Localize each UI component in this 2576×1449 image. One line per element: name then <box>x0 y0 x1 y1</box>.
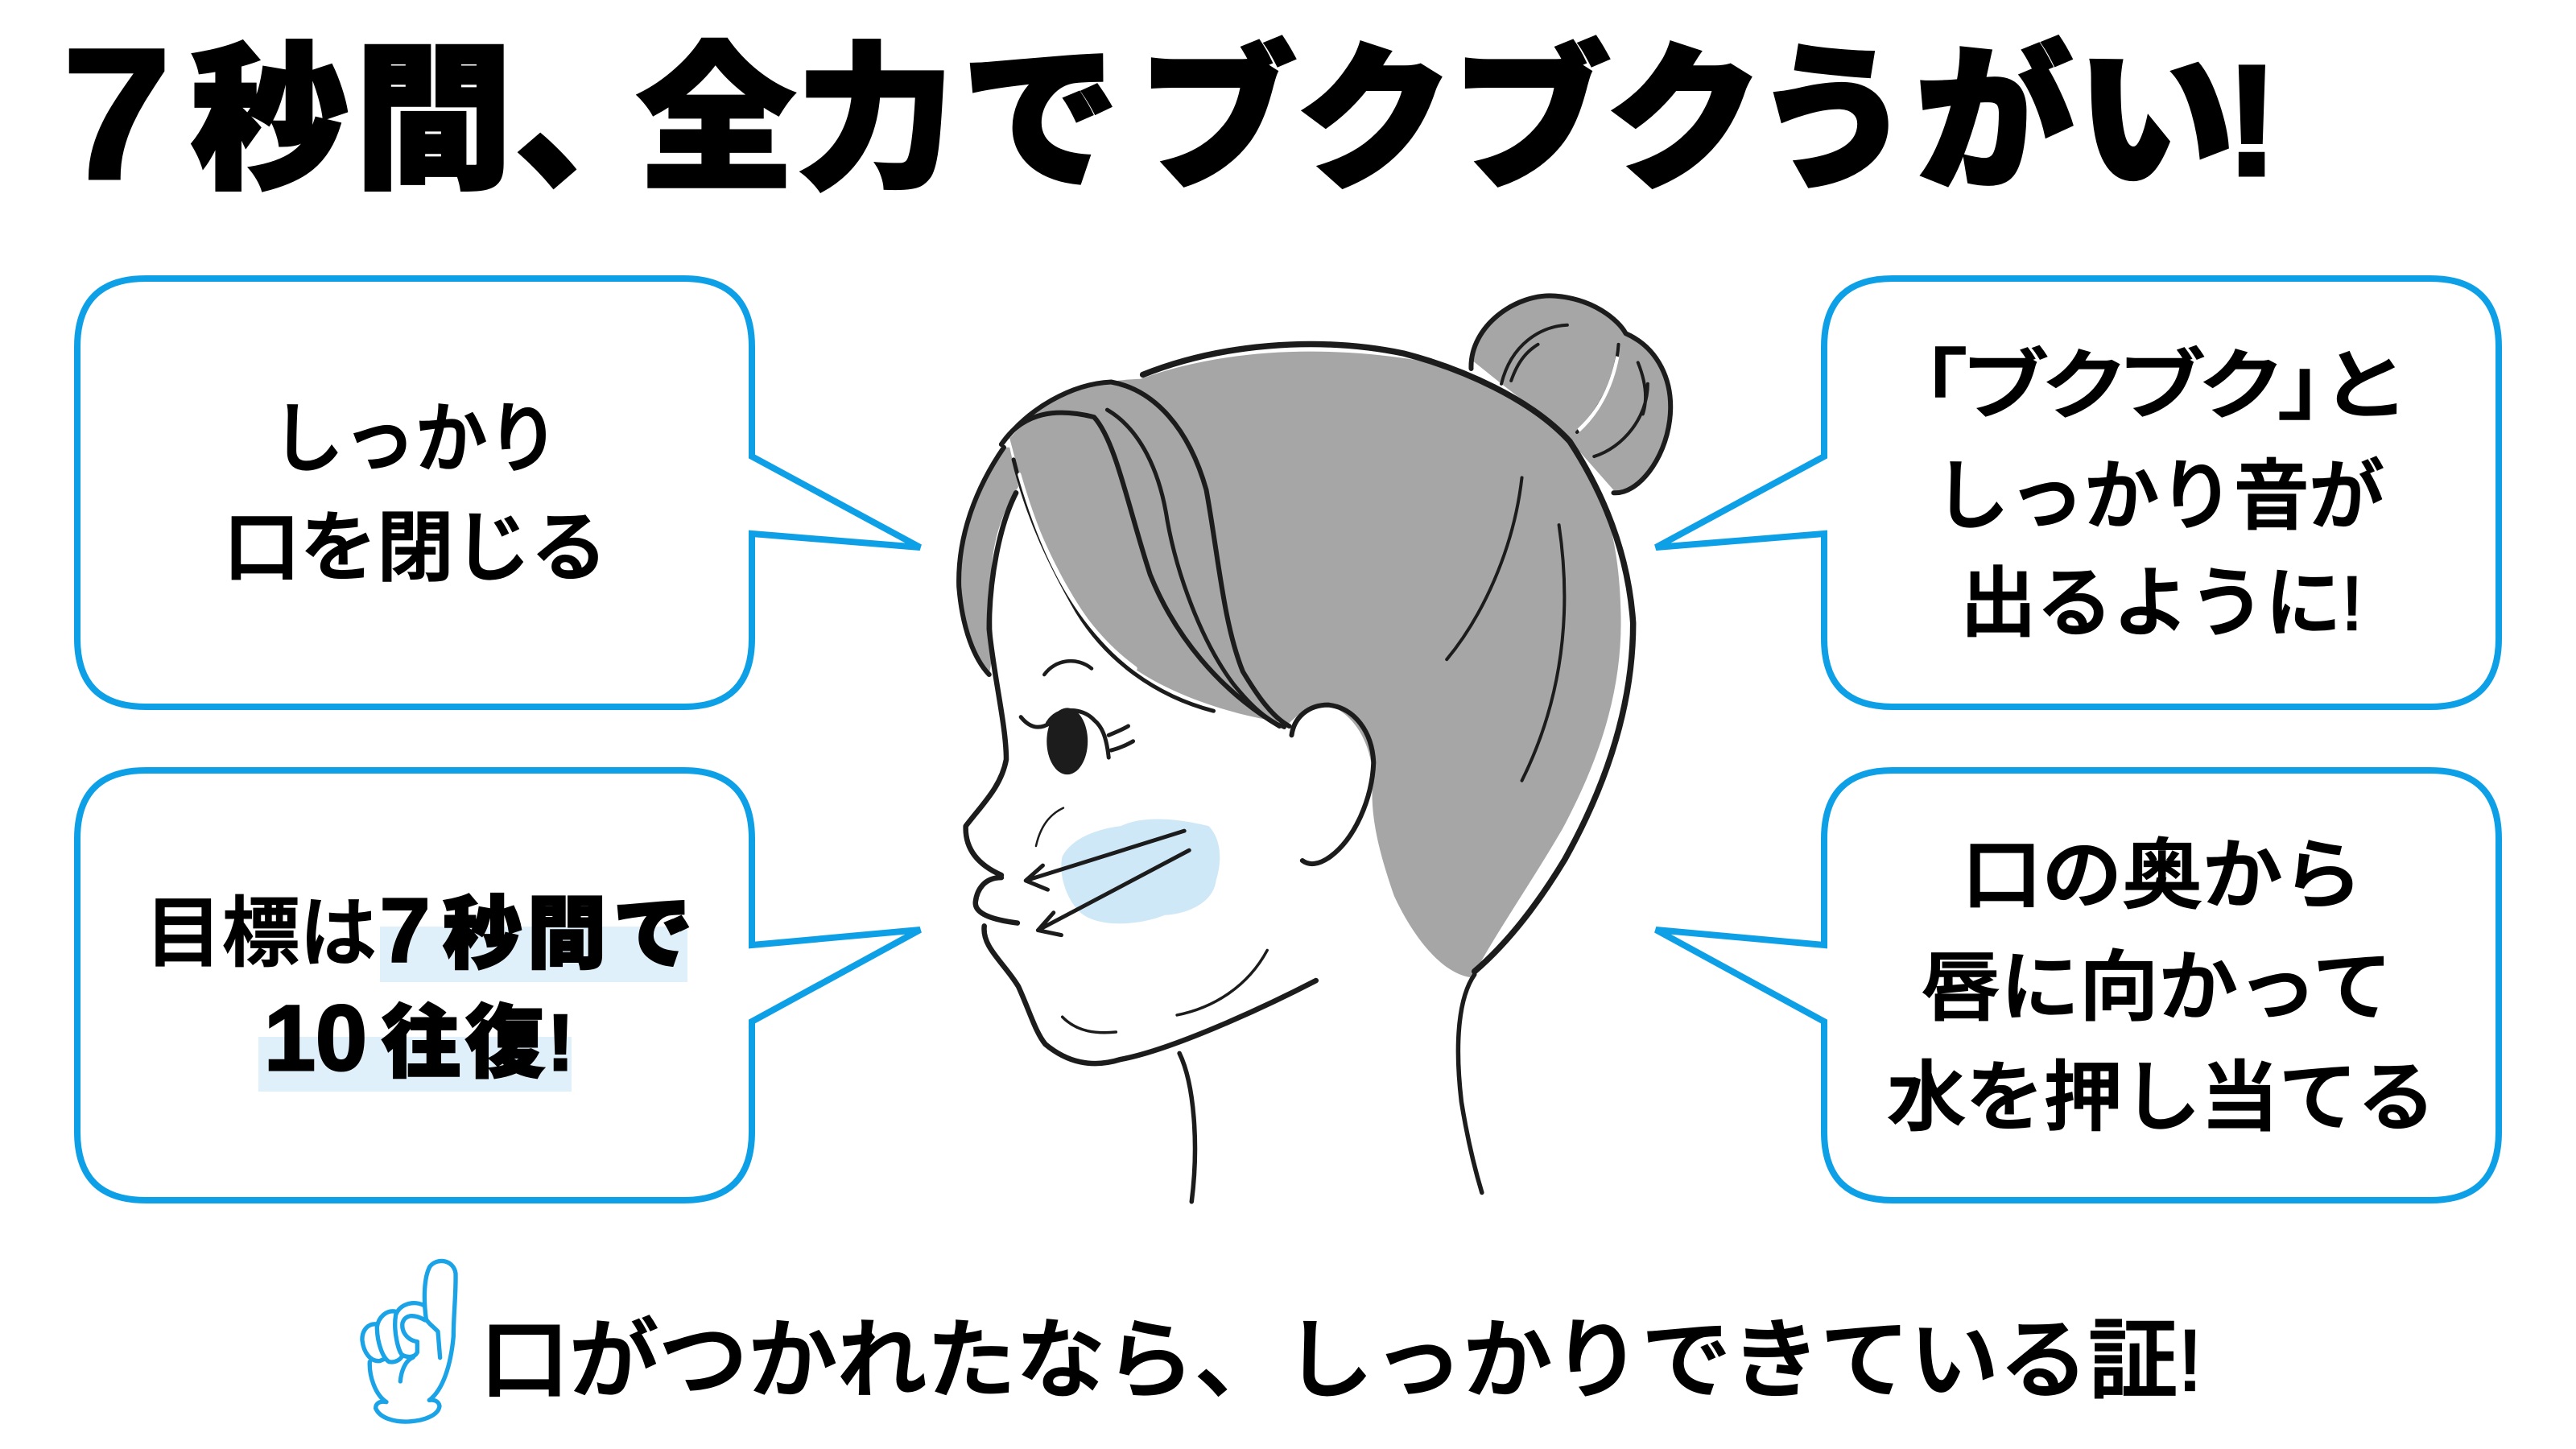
ear <box>1291 705 1373 864</box>
text: conclusion: 口がつかれたなら、しっかりできている証! <box>480 1311 2202 1409</box>
title: 7 <box>63 10 171 217</box>
text: goal: 目標は <box>145 891 377 976</box>
neck <box>1179 975 1482 1202</box>
nose crease <box>1036 808 1063 846</box>
panel: press water callout <box>1656 770 2499 1200</box>
fringe highlight <box>1019 475 1136 668</box>
hair side lock <box>959 448 1018 675</box>
panel: goal callout <box>77 770 920 1200</box>
text: press water: 唇に向かって <box>1921 945 2392 1030</box>
text: bubbling sound: しっかり音が <box>1934 454 2384 539</box>
text: bubbling sound <box>1922 344 2401 646</box>
text: press water: 水を押し当てる <box>1887 1055 2436 1141</box>
hair bun <box>1471 295 1670 493</box>
text: goal: 10 <box>264 987 367 1090</box>
arrows: water direction <box>1026 831 1189 935</box>
text: press water <box>1887 833 2436 1141</box>
face outline <box>966 493 1316 1063</box>
text: goal: 往復! <box>382 998 574 1087</box>
highlight: ten round trips <box>258 1037 572 1092</box>
text: close mouth: 口を閉じる <box>224 506 607 591</box>
panel: close mouth callout <box>77 279 920 707</box>
jaw and cheek creases <box>1063 950 1267 1033</box>
hair outlines <box>959 345 1633 972</box>
text: close mouth: しっかり <box>272 397 559 482</box>
highlight: seven seconds <box>380 927 687 982</box>
text: close mouth <box>224 397 607 591</box>
eye <box>1021 708 1133 774</box>
panel: bubbling sound callout <box>1656 279 2499 707</box>
hair main <box>1009 352 1621 977</box>
text: bubbling sound: 出るように! <box>1960 561 2363 646</box>
text: goal: 7 <box>380 880 430 980</box>
eyebrow <box>1044 661 1092 675</box>
icon: pointing hand <box>362 1261 456 1422</box>
text: bubbling sound: 「ブクブク」と <box>1922 344 2401 429</box>
text: goal: 秒間で <box>443 890 692 978</box>
text: press water: 口の奥から <box>1962 833 2363 919</box>
title: 秒間、全力でブクブクうがい! <box>191 33 2278 208</box>
text: goal <box>145 880 692 1090</box>
cheek blush <box>1061 819 1220 923</box>
illustration: woman in profile rinsing <box>959 295 1670 1202</box>
